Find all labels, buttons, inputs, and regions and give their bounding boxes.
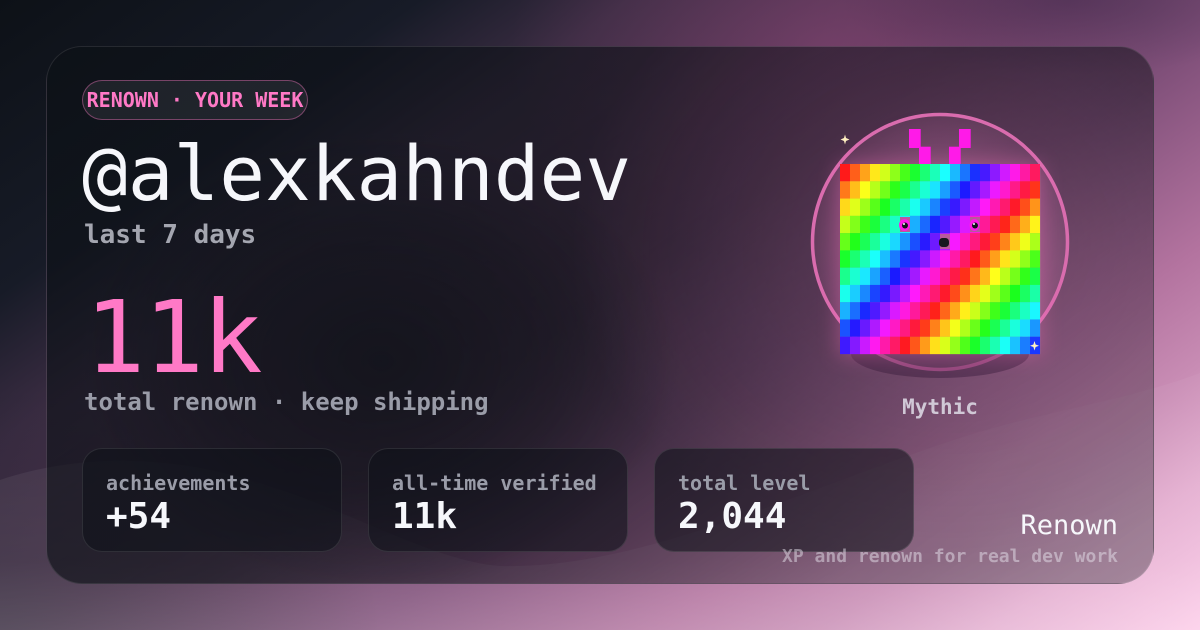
subtitle: period: last 7 days — [84, 220, 256, 250]
panel: main card — [46, 46, 1154, 584]
antennae — [909, 129, 971, 165]
stat card: achievements: achievements — [106, 471, 250, 495]
stat card: achievements — [82, 448, 342, 552]
stat card: all-time verified — [368, 448, 628, 552]
avatar: rainbow pixel creature — [810, 112, 1070, 378]
badge: renown your week: RENOWN · YOUR WEEK — [87, 88, 303, 112]
tier label: Mythic — [902, 395, 978, 419]
caption: total renown: total renown · keep shipping — [84, 388, 489, 416]
halo ring — [812, 114, 1068, 370]
sparkle top left — [840, 134, 850, 144]
brand tagline: XP and renown for real dev work — [782, 546, 1118, 567]
stat card: achievements: +54 — [106, 496, 171, 537]
badge: renown your week — [82, 80, 308, 120]
ground shadow — [851, 330, 1029, 378]
avatar glow — [838, 164, 1042, 356]
stat card: all-time verified: all-time verified — [392, 471, 597, 495]
rainbow pixel body — [840, 164, 1040, 354]
stat card: total level — [654, 448, 914, 552]
big number: total renown: 11k — [85, 279, 261, 396]
sparkle bottom right — [1030, 341, 1039, 350]
brand name: Renown — [1020, 510, 1118, 541]
stat card: total level: 2,044 — [678, 496, 786, 537]
stat card: total level: total level — [678, 471, 810, 495]
left eye — [899, 217, 910, 232]
title: username: @alexkahndev — [82, 129, 631, 218]
stat card: all-time verified: 11k — [392, 496, 457, 537]
right eye — [970, 217, 980, 232]
mouth — [939, 234, 950, 249]
